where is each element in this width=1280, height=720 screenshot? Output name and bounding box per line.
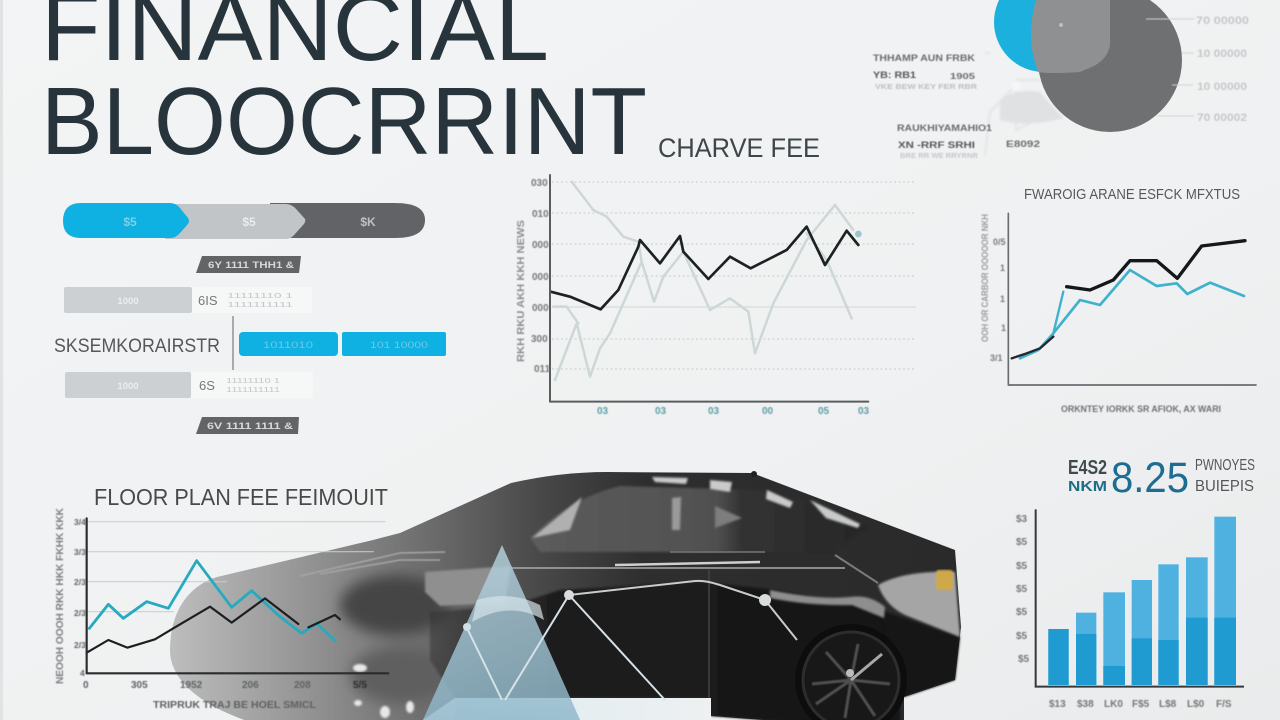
bar chart axis labels: L$8 xyxy=(1159,699,1177,710)
chart axis labels: charge fee: 000 xyxy=(532,240,549,251)
line chart: charge fee xyxy=(550,175,916,402)
divider xyxy=(232,316,234,370)
bar chart axis labels: $3 xyxy=(1016,514,1028,525)
chart axis labels: charge fee: 03 xyxy=(708,406,720,417)
segmented progress pill: $5 xyxy=(242,215,256,229)
dark rear blotch xyxy=(340,575,450,703)
chart axis labels: right: 3/1 xyxy=(990,353,1003,363)
pale reflection spots xyxy=(353,664,414,718)
front bumper shadow xyxy=(880,610,960,697)
lower car body xyxy=(430,582,900,720)
bar chart axis labels: $5 xyxy=(1016,537,1028,548)
bar chart axis labels: $5 xyxy=(1016,561,1028,572)
bar chart axis labels: $5 xyxy=(1016,607,1028,618)
roof cap detail xyxy=(751,471,757,477)
tag: lower: 6V 1111 1111 & xyxy=(207,421,293,432)
stat callout: 8.25: 8.25 xyxy=(1111,454,1189,502)
front wheel xyxy=(795,624,907,720)
blue buttons xyxy=(239,332,446,356)
chart axis labels: floor plan: 305 xyxy=(131,680,148,691)
callout: lower circle note: RAUKHIYAMAHIO1 xyxy=(897,123,993,134)
rear band highlight xyxy=(425,566,511,606)
row: upper fee: 11111110 1 xyxy=(227,293,293,300)
chart axis labels: floor plan: 5/5 xyxy=(353,680,367,691)
chart axis labels: charge fee: 011 xyxy=(534,364,551,375)
side window area xyxy=(530,486,868,552)
callout: upper circle note: 1905 xyxy=(950,71,975,81)
tag: upper: 6Y 1111 THH1 & xyxy=(208,260,294,271)
chart axis labels: charge fee xyxy=(516,178,870,417)
chart axis labels: floor plan: 208 xyxy=(294,680,311,691)
translucent triangle xyxy=(422,545,581,720)
chart axis labels: charge fee: 03 xyxy=(858,406,870,417)
heading: right chart: FWAROIG ARANE ESFCK MFXTUS xyxy=(1024,186,1240,203)
floor band xyxy=(455,698,711,720)
overlapping circle diagram xyxy=(994,0,1182,132)
chart axis labels: right: OOH OR CARBOR OOOOOR NKH xyxy=(980,214,990,342)
circle value labels: 10 00000 xyxy=(1197,48,1247,60)
bar chart axis labels: $5 xyxy=(1016,584,1028,595)
chart axis labels: floor plan: 0 xyxy=(83,680,89,691)
circle value labels: 70 00000 xyxy=(1196,15,1249,27)
chart axis labels: floor plan: 3/4 xyxy=(74,517,86,527)
stat callout: 8.25: E4S2 xyxy=(1068,457,1107,479)
chart axis labels: floor plan: 2/3 xyxy=(74,608,86,618)
line chart: floor plan fee xyxy=(87,518,388,673)
bar chart axis labels: $5 xyxy=(1016,631,1028,642)
row: lower fee: 1111111111 xyxy=(226,387,280,394)
chart axis labels: charge fee: 000 xyxy=(532,272,549,283)
chart axis labels: charge fee: 03 xyxy=(655,406,667,417)
bar chart axis labels: F/S xyxy=(1216,699,1232,710)
row: lower fee: 11111110 1 xyxy=(226,378,280,385)
segmented progress pill: $5 xyxy=(123,215,137,229)
segmented progress pill xyxy=(63,203,425,239)
car illustration xyxy=(170,471,961,720)
bar chart axis labels: F$5 xyxy=(1132,699,1150,710)
chart axis labels: charge fee: 300 xyxy=(531,334,548,345)
segmented progress pill: $K xyxy=(360,215,376,229)
callout: upper circle note: THHAMP AUN FRBK xyxy=(873,53,975,64)
chart axis labels: right: ORKNTEY IORKK SR AFIOK, AX WARI xyxy=(1061,404,1221,415)
blue buttons: 101 10000 xyxy=(370,340,428,350)
fender sweep xyxy=(770,590,885,618)
stat callout: 8.25: PWNOYES xyxy=(1195,457,1255,474)
heading: floor plan fee: FLOOR PLAN FEE FEIMOUIT xyxy=(94,484,388,510)
chart axis labels: charge fee: 03 xyxy=(597,406,609,417)
callout: lower circle note: E8092 xyxy=(1006,139,1040,149)
bar chart axis labels: $5 xyxy=(1018,654,1030,665)
chart axis labels: right: 1 xyxy=(1000,263,1005,273)
row: upper fee: 1111111111 xyxy=(227,302,293,309)
chart axis labels: floor plan: 3/3 xyxy=(74,547,86,557)
network line overlay xyxy=(463,581,797,700)
front fender panel xyxy=(878,572,960,637)
blue buttons: 1011010 xyxy=(263,340,313,350)
stat callout: 8.25: NKM xyxy=(1068,478,1107,495)
chart axis labels: floor plan: NEOOH OOOH RKK HKK FKHK KKK xyxy=(55,507,66,684)
label: middle row: SKSEMKORAIRSTR xyxy=(54,335,220,357)
stat callout: 8.25: BUIEPIS xyxy=(1195,478,1254,495)
callout: lower circle note: BRE RR WE RRYRNR xyxy=(900,153,978,160)
chart axis labels: charge fee: 030 xyxy=(531,178,548,189)
callout: lower circle note xyxy=(897,123,1040,160)
line chart: right xyxy=(1008,213,1256,385)
chart axis labels: floor plan: 2/3 xyxy=(74,577,86,587)
belt lines xyxy=(511,552,878,700)
chart axis labels: right xyxy=(980,214,1221,415)
chart axis labels: charge fee: 00 xyxy=(762,406,774,417)
row: lower fee: 1000 xyxy=(117,381,139,392)
chart axis labels: floor plan xyxy=(55,507,367,711)
chart axis labels: floor plan: 2/3 xyxy=(74,640,86,650)
bar chart xyxy=(1036,509,1244,687)
row: upper fee: 1000 xyxy=(117,296,139,307)
circle value labels: 70 00002 xyxy=(1197,112,1247,124)
chart axis labels: right: 1 xyxy=(1001,323,1006,333)
chart axis labels: charge fee: 010 xyxy=(532,209,549,220)
bar chart axis labels xyxy=(1016,514,1232,710)
callout: lower circle note: XN -RRF SRHI xyxy=(898,140,975,151)
chart axis labels: right: 1 xyxy=(1000,294,1005,304)
bar chart axis labels: L$0 xyxy=(1187,699,1205,710)
chart axis labels: right: 0/5 xyxy=(993,237,1006,247)
heading: charge fee: CHARVE FEE xyxy=(658,133,820,163)
chart axis labels: charge fee: 000 xyxy=(532,303,549,314)
pale connector graphic xyxy=(985,53,1064,155)
row: upper fee xyxy=(64,287,312,313)
callout: upper circle note: VKE BEW KEY FER RBR xyxy=(875,82,978,91)
title xyxy=(41,0,647,175)
row: lower fee xyxy=(65,372,313,398)
chart axis labels: floor plan: 4 xyxy=(80,668,85,678)
chart axis labels: charge fee: RKH RKU AKH KKH NEWS xyxy=(516,220,527,362)
window glints xyxy=(532,477,860,538)
row: upper fee: 6IS xyxy=(198,293,218,308)
stat callout: 8.25 xyxy=(1068,454,1255,502)
bar chart axis labels: LK0 xyxy=(1104,699,1123,710)
circle value labels: 10 00000 xyxy=(1197,81,1247,93)
rear light streaks xyxy=(300,552,445,576)
bar chart axis labels: $38 xyxy=(1077,699,1094,710)
chart axis labels: floor plan: 206 xyxy=(242,680,259,691)
headlight xyxy=(936,570,953,590)
title: BLOOCRRINT xyxy=(41,68,647,175)
tag: upper xyxy=(196,256,301,273)
bar chart axis labels: $13 xyxy=(1049,699,1066,710)
chart axis labels: floor plan: 1952 xyxy=(180,680,203,691)
tag: lower xyxy=(196,417,299,434)
callout: upper circle note xyxy=(873,53,978,91)
row: lower fee: 6S xyxy=(199,378,215,393)
circle value labels xyxy=(1146,15,1249,124)
callout: upper circle note: YB: RB1 xyxy=(873,70,917,81)
chart axis labels: floor plan: TRIPRUK TRAJ BE HOEL SMICL xyxy=(153,699,317,711)
chart axis labels: charge fee: 05 xyxy=(818,406,830,417)
